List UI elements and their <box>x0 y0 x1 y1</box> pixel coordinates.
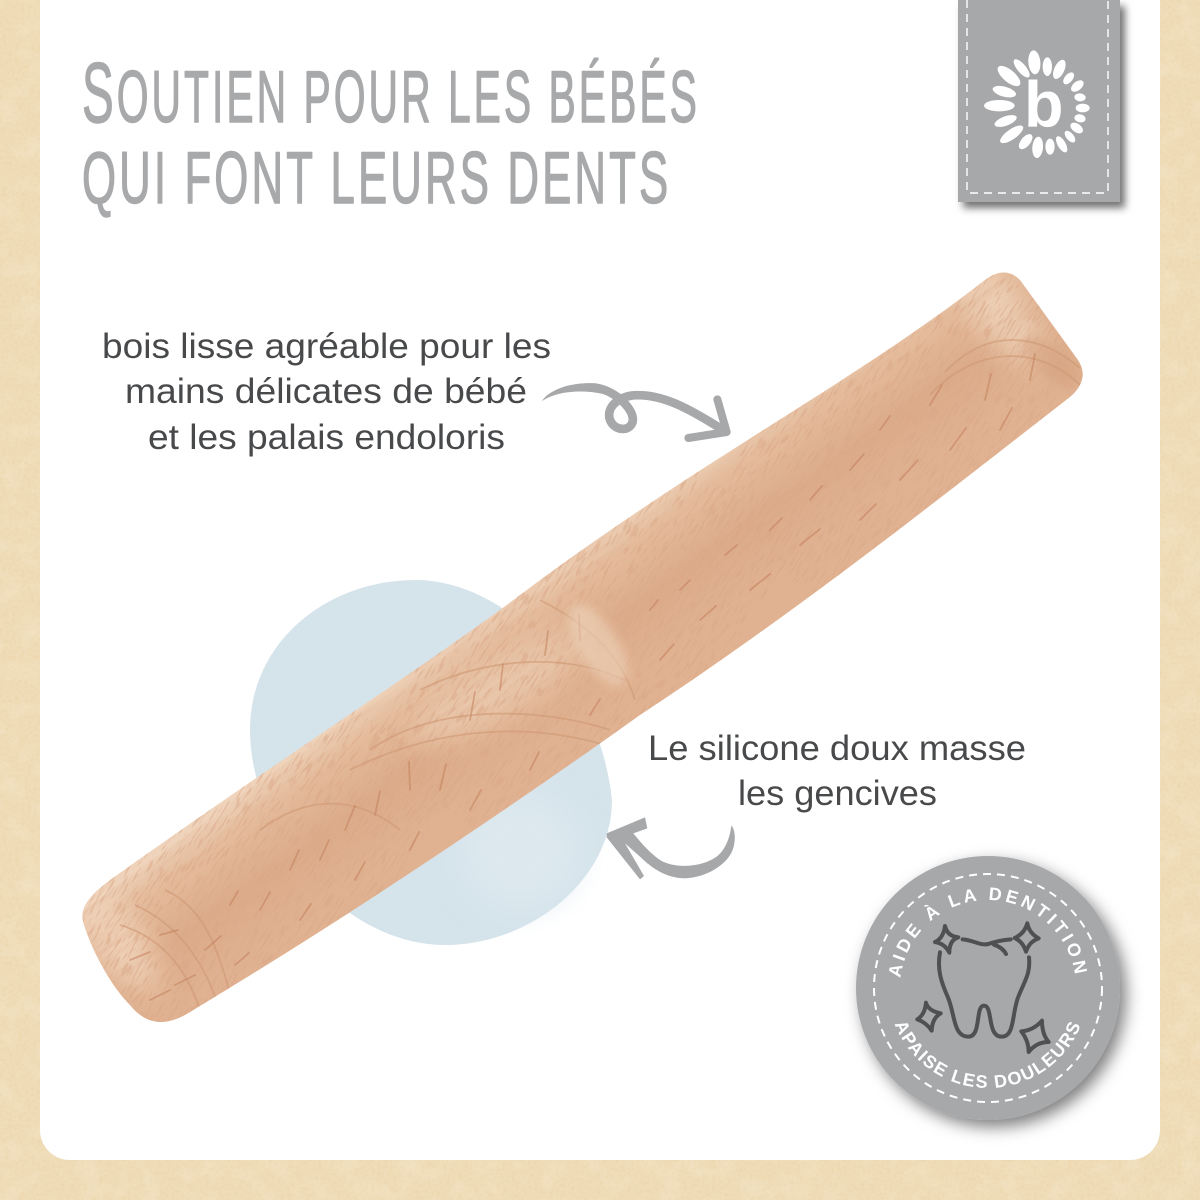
badge bottom text: APAISE LES DOULEURS <box>894 1022 1080 1088</box>
wooden ring bar <box>82 272 1083 1022</box>
arrow: to wood <box>542 383 727 438</box>
callout text: wood <box>102 327 551 457</box>
silicone disc <box>250 580 612 945</box>
callout text: silicone: Le silicone doux masse <box>648 729 1026 768</box>
wood pores <box>130 354 1035 1000</box>
badge top text: AIDE À LA DENTITION <box>889 887 1087 978</box>
brand tag <box>958 0 1120 202</box>
title <box>82 45 697 219</box>
callout text: wood: mains délicates de bébé <box>125 372 527 411</box>
growth rings <box>120 340 1080 1010</box>
title: QUI FONT LEURS DENTS <box>82 138 668 219</box>
icon: brand flower logo <box>984 50 1090 158</box>
callout text: silicone: les gencives <box>738 774 937 813</box>
callout text: wood: bois lisse agréable pour les <box>102 327 551 366</box>
callout text: wood: et les palais endoloris <box>148 418 505 457</box>
title: SOUTIEN POUR LES BÉBÉS <box>82 45 697 141</box>
callout text: silicone <box>648 729 1026 813</box>
icon: brand flower logo: b <box>1024 68 1063 141</box>
icon: tooth with sparkles <box>917 923 1049 1052</box>
badge: teething aid <box>850 852 1138 1138</box>
knot speckle <box>566 604 630 687</box>
arrow: to silicone <box>607 817 735 879</box>
